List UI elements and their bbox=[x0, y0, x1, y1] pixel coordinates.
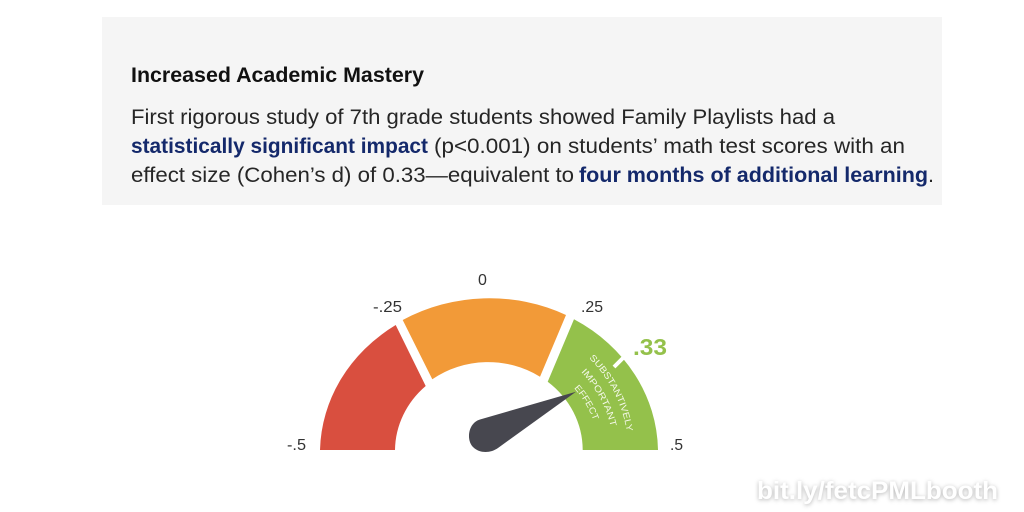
scale labels bbox=[287, 272, 683, 454]
text block: findings: effect size (Cohen’s d) of 0.33—equivalent to bbox=[131, 163, 574, 187]
curved label: substantively important effect: SUBSTANTIVELY bbox=[590, 355, 633, 430]
gauge segment: orange bbox=[403, 298, 566, 379]
text block: findings: First rigorous study of 7th grade students showed Family Playlists had a bbox=[131, 105, 835, 129]
needle bbox=[469, 392, 576, 452]
scale labels: .25 bbox=[581, 299, 603, 316]
tick mark at .33 bbox=[614, 354, 627, 367]
text block: findings: four months of additional learning bbox=[579, 163, 928, 187]
value label: .33 bbox=[633, 334, 667, 360]
text block: findings: . bbox=[928, 163, 934, 187]
text block: findings: statistically significant impact bbox=[131, 134, 428, 158]
gauge segment: green bbox=[548, 319, 658, 450]
panel: study summary bbox=[102, 17, 942, 205]
watermark link: bit.ly/fetcPMLbooth bbox=[757, 477, 998, 505]
scale labels: .5 bbox=[670, 437, 683, 454]
curved label: substantively important effect: EFFECT bbox=[574, 384, 600, 418]
heading: Increased Academic Mastery bbox=[131, 64, 424, 87]
scale labels: -.25 bbox=[373, 299, 402, 316]
scale labels: 0 bbox=[478, 272, 487, 289]
text block: findings bbox=[131, 105, 934, 187]
scale labels: -.5 bbox=[287, 437, 306, 454]
chart: effect size gauge bbox=[287, 272, 683, 454]
curved label: substantively important effect: IMPORTANT bbox=[582, 368, 617, 426]
text block: findings: (p<0.001) on students’ math test scores with an bbox=[434, 134, 905, 158]
gauge segment: red bbox=[320, 325, 426, 450]
